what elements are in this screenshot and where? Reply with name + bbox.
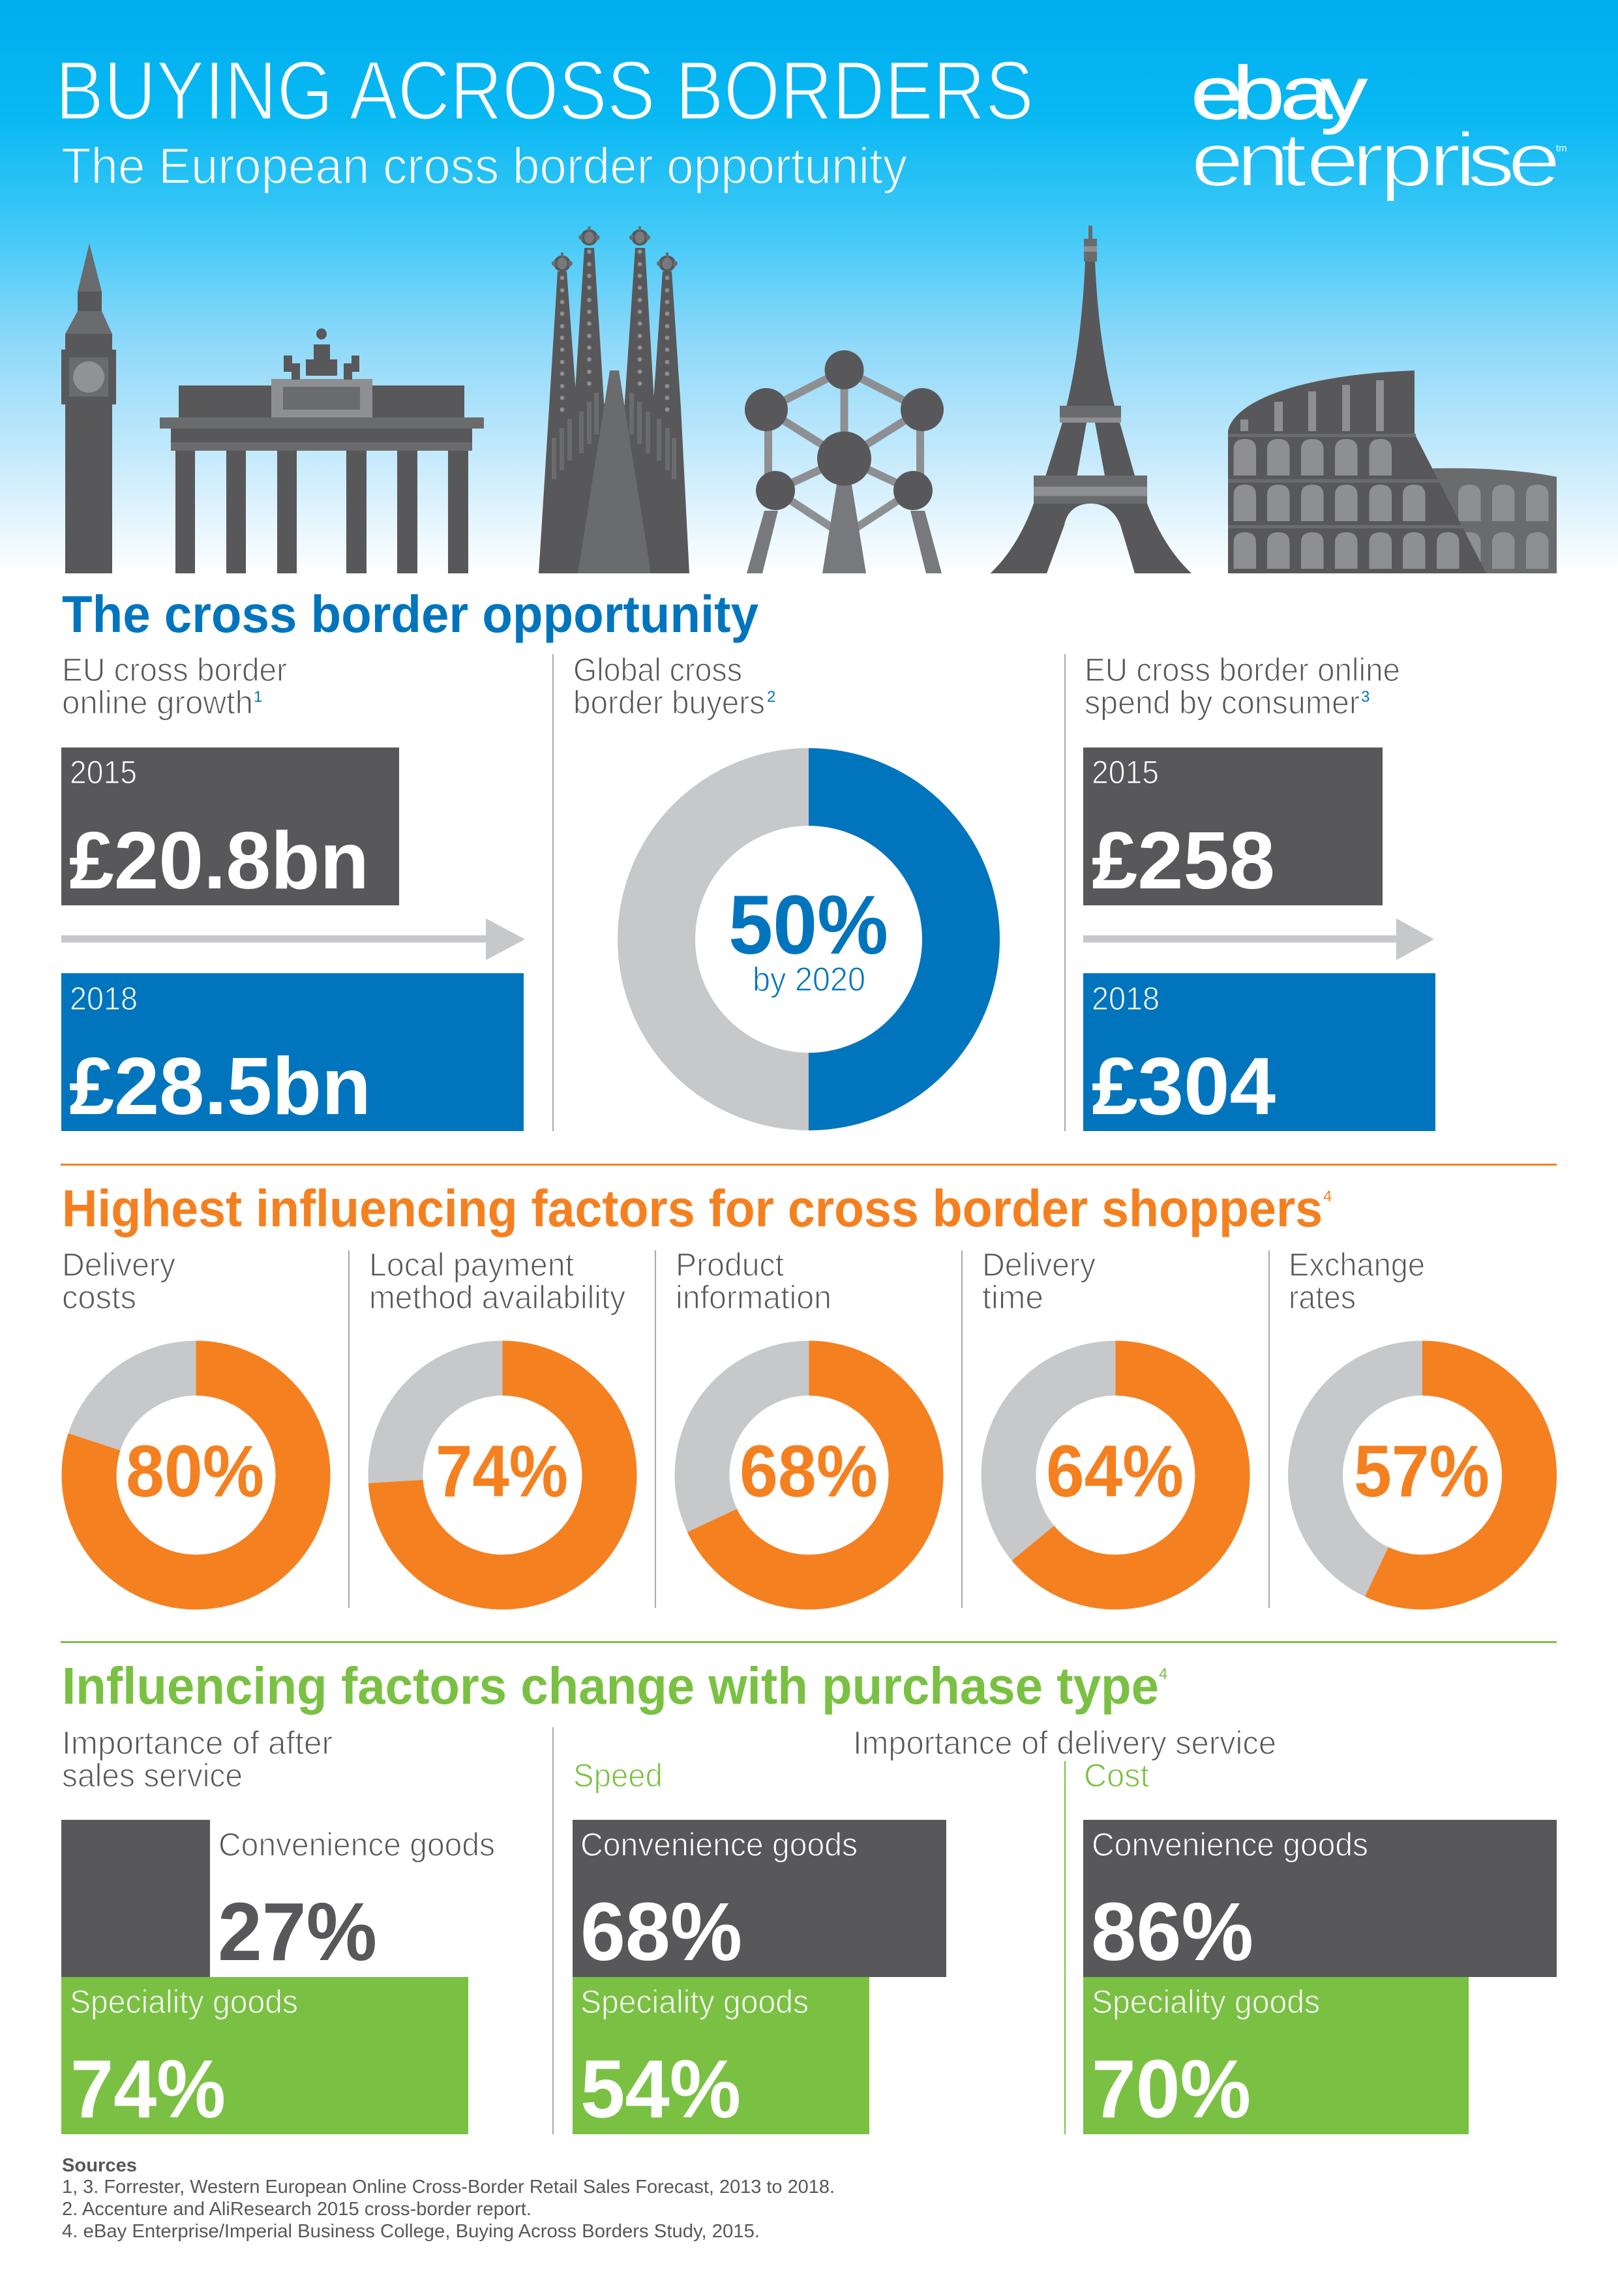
subtitle: The European cross border opportunity [61,137,907,194]
bar: speciality goods 74%: Speciality goods [70,1984,298,2020]
panel: EU cross border online spend by consumer [1083,652,1435,1132]
header background [0,0,1618,574]
sources: 4. eBay Enterprise/Imperial Business College, Buying Across Borders Study, 2015. [62,2221,760,2242]
donut chart: 74% [436,1430,568,1512]
donut chart [395,1368,609,1582]
label [1085,652,1400,721]
bar: speciality goods 54% [573,1977,869,2135]
icon: Sagrada Familia [539,226,689,573]
bar: speciality goods 54%: Speciality goods [580,1984,809,2020]
icon: Atomium [745,350,944,573]
bar: convenience goods 68%: 68% [580,1886,742,1978]
box: 2015 value [1083,748,1383,906]
donut chart: 50% [656,787,961,1092]
sources [62,2155,835,2242]
donut chart: 68% [740,1430,878,1512]
bar: speciality goods 74%: 74% [70,2043,226,2135]
label: costs [62,1279,136,1316]
sources: Sources [62,2155,137,2176]
icon: Colosseum [1228,370,1557,573]
bar: speciality goods 74% [61,1977,468,2135]
box: 2018 value: 2018 [70,980,138,1017]
label [982,1246,1096,1316]
donut chart: 64% [1046,1430,1184,1512]
label: Global cross [573,652,742,688]
bar: convenience goods 86%: Convenience goods [1092,1826,1368,1863]
label: Product [676,1246,784,1283]
box: 2015 value: 2015 [70,754,137,791]
label: information [676,1279,831,1316]
label: Delivery [982,1246,1096,1283]
label [676,1246,831,1316]
arrow [1083,918,1434,960]
bar: convenience goods 27% [61,1820,495,1978]
sources: 2. Accenture and AliResearch 2015 cross-border report. [62,2199,532,2220]
bar: convenience goods 27%: 27% [218,1886,377,1978]
label: EU cross border [62,652,287,688]
label: time [982,1279,1043,1316]
box: 2018 value [1083,973,1435,1132]
panel: EU cross border online growth [61,652,525,1132]
bar: speciality goods 70%: 70% [1092,2043,1251,2135]
label: method availability [369,1279,625,1316]
box: 2015 value: £258 [1092,816,1275,906]
title: BUYING ACROSS BORDERS [55,44,1034,138]
donut chart [1315,1368,1529,1582]
label: border buyers [573,684,765,721]
bar: convenience goods 27%: Convenience goods [218,1826,495,1863]
box: 2018 value: 2018 [1092,980,1160,1017]
label: 3 [1361,688,1370,706]
sources: 1, 3. Forrester, Western European Online Cross-Border Retail Sales Forecast, 2013 to 2018. [62,2177,835,2198]
bar: convenience goods 68% [573,1820,946,1978]
box: 2018 value: £28.5bn [69,1042,371,1132]
label: spend by consumer [1085,684,1360,721]
panel: cost [1083,1757,1557,2135]
label: importance of delivery service: Importance of delivery service [853,1725,1276,1761]
bar: speciality goods 54%: 54% [580,2043,741,2135]
logo: ebay enterprise [1191,51,1567,203]
donut chart: 57% [1354,1430,1490,1512]
label: sales service [62,1757,243,1794]
heading: highest influencing factors: 4 [1323,1188,1332,1205]
panel: exchange rates 57% [1289,1246,1529,1582]
logo: ebay enterprise: enterprise [1191,117,1561,203]
box: 2018 value [61,973,524,1132]
label: Speed [573,1757,663,1794]
label: Exchange [1289,1246,1425,1283]
label [1289,1246,1425,1316]
label: Delivery [62,1246,175,1283]
box: 2015 value: £20.8bn [69,816,369,906]
donut chart [702,1368,916,1582]
bar: speciality goods 70% [1083,1977,1469,2135]
logo: ebay enterprise: tm [1556,143,1567,154]
heading: influencing factors change: 4 [1159,1665,1167,1683]
panel: product information 68% [676,1246,916,1582]
label [369,1246,625,1316]
label: Cost [1084,1757,1149,1794]
box: 2015 value [61,748,399,906]
heading: highest influencing factors: Highest influencing factors for cross border shoppers [62,1179,1323,1237]
panel: delivery costs 80% [62,1246,303,1582]
box: 2015 value: 2015 [1092,754,1159,791]
bar: convenience goods 68%: Convenience goods [580,1826,858,1863]
label: Importance of after [62,1725,333,1761]
donut chart [1008,1368,1222,1582]
bar: speciality goods 70%: Speciality goods [1092,1984,1320,2020]
icon: Brandenburg Gate [160,329,484,573]
label: 1 [254,688,262,706]
heading: influencing factors change: Influencing factors change with purchase type [62,1657,1159,1715]
logo: ebay enterprise: ebay [1191,51,1368,135]
bar: convenience goods 86% [1083,1820,1557,1978]
icon: Eiffel Tower [990,226,1191,573]
panel: importance of after sales service [61,1725,495,2135]
panel: delivery time 64% [982,1246,1222,1582]
bar: convenience goods 86%: 86% [1091,1886,1253,1978]
box: 2018 value: £304 [1092,1042,1276,1132]
donut chart: 80% [126,1430,264,1512]
label: 2 [767,688,775,706]
arrow [61,918,525,960]
donut chart: 50%: 50% [728,879,888,972]
label [62,1725,333,1794]
label: EU cross border online [1085,652,1400,688]
donut chart: 50%: by 2020 [753,961,865,999]
label: online growth [62,684,253,721]
panel: global cross border buyers [573,652,961,1092]
donut chart [89,1368,303,1582]
icon: Big Ben [61,243,116,573]
label: Local payment [369,1246,574,1283]
label [573,652,775,721]
label [62,1246,175,1316]
heading: the cross border opportunity: The cross border opportunity [62,585,758,643]
panel: local payment method availability 74% [369,1246,625,1582]
label [62,652,287,721]
panel: speed [573,1757,946,2135]
label: rates [1289,1279,1356,1316]
